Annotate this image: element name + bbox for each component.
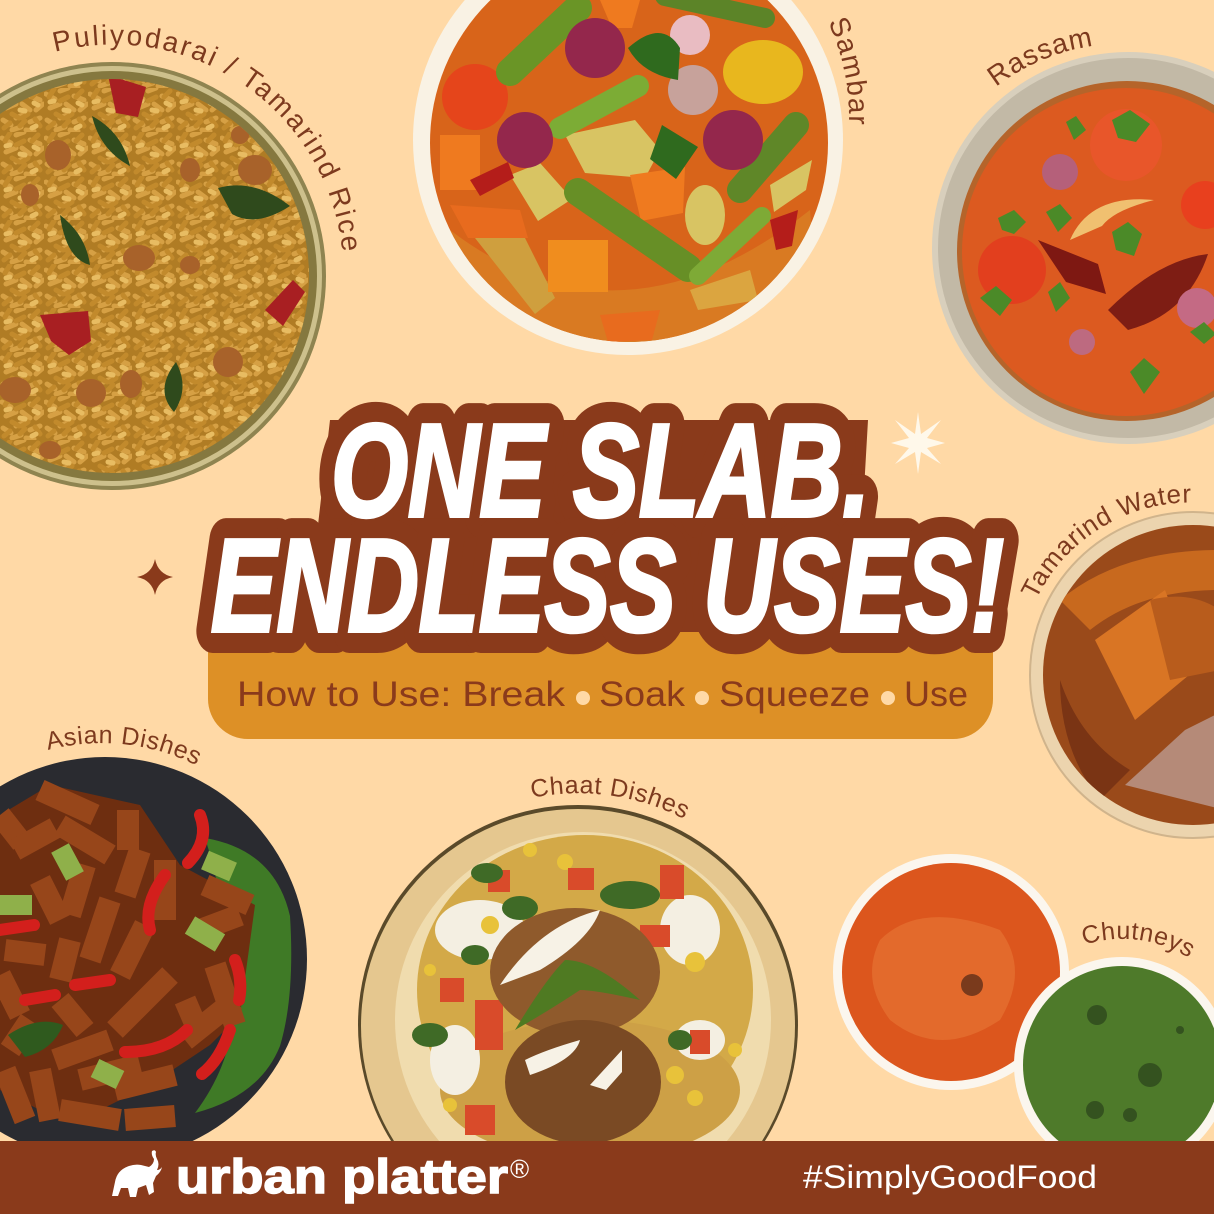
panel: green chutney bowl [1014, 957, 1214, 1141]
label: Tamarind Water: Tamarind Water [1020, 488, 1190, 594]
label: Sambar: Sambar [830, 18, 867, 124]
how to use text [237, 675, 968, 714]
how to use text: How to Use: Break [237, 675, 566, 714]
panel: Asian dishes plate [0, 757, 307, 1161]
panel: red chutney bowl [833, 854, 1069, 1090]
registered mark: ® [510, 1154, 529, 1184]
how to use text: Squeeze [719, 675, 870, 714]
panel: Sambar bowl [413, 0, 843, 355]
title: one slab endless uses [205, 397, 1004, 659]
hashtag: #SimplyGoodFood [803, 1159, 1097, 1195]
label: Puliyodarai: Puliyodarai / Tamarind Rice [53, 24, 356, 250]
label: Chaat Dishes: Chaat Dishes [532, 776, 688, 818]
footer bar [0, 1141, 1214, 1214]
label: Chutneys: Chutneys [1082, 922, 1194, 956]
icon: elephant logo [112, 1150, 162, 1197]
how to use text: Use [904, 675, 968, 714]
title: one slab endless uses: ONE SLAB. [331, 397, 870, 544]
panel: Chaat dishes plate [358, 805, 798, 1141]
panel: Tamarind water glass [1030, 512, 1214, 838]
panel: how to use pill [208, 630, 993, 739]
label: Rassam: Rassam [986, 32, 1092, 86]
title: one slab endless uses: ONE SLAB. [331, 397, 870, 544]
sparkle: white star [891, 412, 945, 474]
how to use text: Soak [599, 675, 686, 714]
panel: Puliyodarai tamarind rice bowl [0, 62, 326, 490]
label: Asian Dishes: Asian Dishes [48, 726, 200, 764]
icon: brown sparkle [137, 559, 173, 595]
brand name: urban platter [176, 1151, 508, 1204]
panel: Rassam bowl [932, 52, 1214, 444]
